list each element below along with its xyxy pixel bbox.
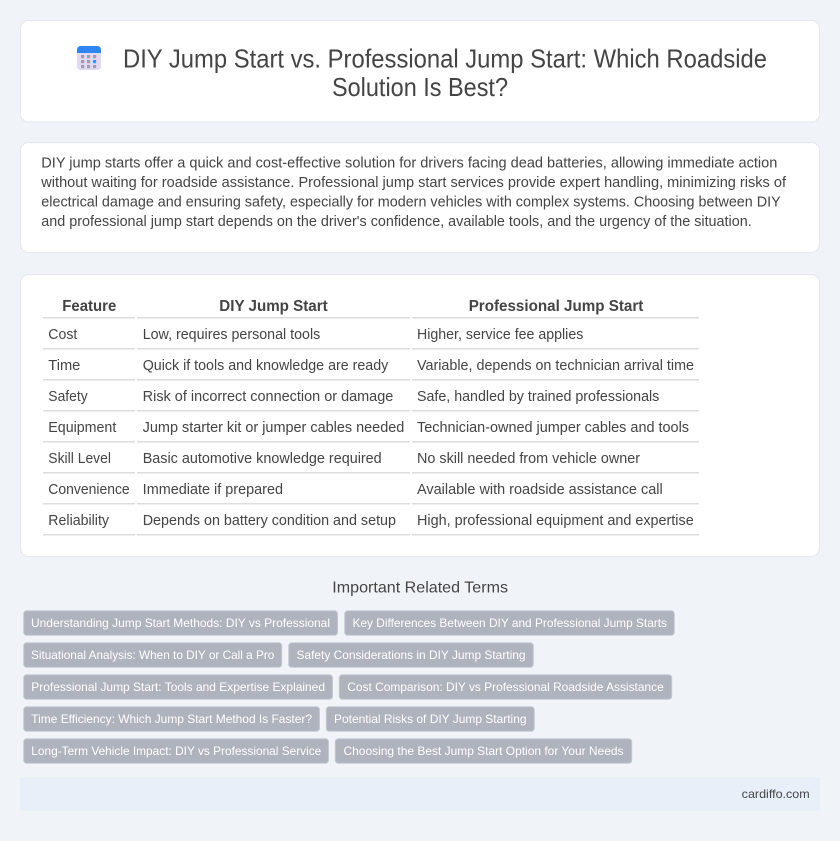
panel: introduction (20, 142, 820, 252)
table header row: Feature (62, 298, 116, 315)
row: time: Variable, depends on technician arrival time (417, 358, 694, 374)
row: equipment (48, 420, 689, 436)
chip (339, 675, 672, 699)
row: skill level: No skill needed from vehicle owner (417, 451, 640, 467)
row: safety: Safe, handled by trained professionals (417, 389, 659, 405)
chip: Long-Term Vehicle Impact: DIY vs Professional Service (31, 744, 322, 758)
row: safety (48, 389, 659, 405)
row: safety: Safety (48, 389, 88, 405)
row: cost: Cost (48, 327, 77, 343)
chip (335, 739, 632, 763)
table header row: DIY Jump Start (219, 298, 328, 315)
row: convenience: Available with roadside assistance call (417, 482, 663, 498)
chip: Choosing the Best Jump Start Option for Your Needs (344, 744, 624, 758)
row: cost: Higher, service fee applies (417, 327, 583, 343)
icon: calendar (77, 46, 101, 70)
row: equipment: Technician-owned jumper cables and tools (417, 420, 689, 436)
row: reliability (48, 513, 694, 529)
row: reliability: Reliability (48, 513, 110, 529)
text block: introduction paragraph (40, 156, 787, 230)
title: Solution Is Best? (332, 74, 508, 102)
chip (345, 611, 674, 635)
row: skill level: Basic automotive knowledge required (143, 451, 382, 467)
chip (24, 611, 337, 635)
text block: introduction paragraph: without waiting for roadside assistance. Professional jump start services provide expert handling, minimizing risks of (40, 175, 787, 191)
heading: important related terms: Important Related Terms (332, 580, 508, 597)
chip (24, 707, 319, 731)
row: cost (48, 327, 583, 343)
row: convenience (48, 482, 663, 498)
panel: header (20, 20, 820, 122)
row: skill level (48, 451, 640, 467)
chip: Understanding Jump Start Methods: DIY vs Professional (31, 616, 330, 630)
chip: Situational Analysis: When to DIY or Call a Pro (31, 648, 275, 662)
table header row: Professional Jump Start (469, 298, 644, 315)
row: time: Time (48, 358, 80, 374)
chip (24, 739, 328, 763)
chip (326, 707, 534, 731)
row: reliability: Depends on battery condition and setup (143, 513, 396, 529)
chip: Potential Risks of DIY Jump Starting (334, 712, 526, 726)
text block: introduction paragraph: electrical damage and ensuring safety, especially for modern vehicles with complex systems. Choosing between DIY (41, 195, 781, 211)
panel: related term chips (24, 611, 674, 763)
row: safety: Risk of incorrect connection or damage (143, 389, 393, 405)
chip (24, 643, 282, 667)
text block: introduction paragraph: DIY jump starts offer a quick and cost-effective solution for drivers facing dead batteries, allowing immediate action (41, 156, 777, 172)
text block: introduction paragraph: and professional jump start depends on the driver's confidence, available tools, and the urgency of the situation. (41, 214, 752, 230)
chip: Safety Considerations in DIY Jump Starting (296, 648, 526, 662)
footer: cardiffo.com (742, 787, 810, 801)
chip: Key Differences Between DIY and Professional Jump Starts (352, 616, 667, 630)
row: convenience: Immediate if prepared (143, 482, 283, 498)
chip: Time Efficiency: Which Jump Start Method Is Faster? (31, 712, 312, 726)
row: reliability: High, professional equipment and expertise (417, 513, 694, 529)
table header row (62, 298, 644, 315)
title (123, 45, 767, 102)
panel: comparison table (20, 274, 820, 556)
row: time (48, 358, 694, 374)
row: cost: Low, requires personal tools (143, 327, 320, 343)
row: convenience: Convenience (48, 482, 130, 498)
chip: Cost Comparison: DIY vs Professional Roadside Assistance (347, 680, 664, 694)
row: equipment: Equipment (48, 420, 116, 436)
chip: Professional Jump Start: Tools and Expertise Explained (31, 680, 325, 694)
row: time: Quick if tools and knowledge are ready (143, 358, 389, 374)
footer (20, 777, 820, 811)
row: equipment: Jump starter kit or jumper cables needed (143, 420, 404, 436)
chip (24, 675, 332, 699)
row: skill level: Skill Level (48, 451, 111, 467)
chip (289, 643, 533, 667)
title: DIY Jump Start vs. Professional Jump Start: Which Roadside (123, 45, 767, 73)
